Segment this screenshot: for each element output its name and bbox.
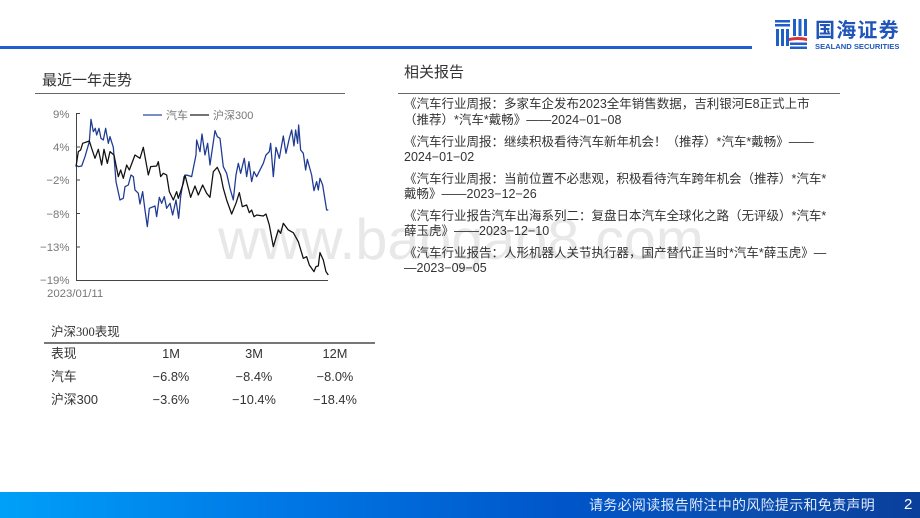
table header row: 12M [323, 346, 347, 361]
y axis labels: 9% [53, 109, 70, 121]
report 1: （推荐）*汽车*戴畅》——2024−01−08 [404, 112, 621, 126]
legend: 沪深300 [213, 108, 253, 122]
report 5: —2023−09−05 [404, 260, 487, 274]
table row: auto [51, 369, 353, 384]
disclaimer: 请务必阅读报告附注中的风险提示和免责声明 [589, 497, 875, 513]
x axis label: 2023/01/11 [47, 288, 103, 300]
table row: CSI 300: −10.4% [232, 392, 276, 407]
page number: 2 [904, 496, 912, 513]
y axis labels [40, 109, 70, 287]
logo [775, 19, 900, 51]
table header row: 表现 [51, 346, 77, 361]
heading: CSI 300 performance: 沪深300表现 [51, 325, 120, 339]
report 1: 《汽车行业周报：多家车企发布2023全年销售数据，吉利银河E8正式上市 [404, 97, 810, 111]
report 4: 《汽车行业报告汽车出海系列二：复盘日本汽车全球化之路（无评级）*汽车* [404, 209, 826, 223]
table row: CSI 300 [51, 392, 357, 407]
table row: auto: 汽车 [51, 369, 77, 384]
heading: recent one-year trend: 最近一年走势 [42, 72, 132, 89]
table row: CSI 300: 沪深300 [51, 392, 98, 407]
y axis labels: −2% [46, 175, 70, 187]
table header row: 3M [245, 346, 263, 361]
header rule [0, 46, 752, 49]
y axis labels: −19% [40, 275, 70, 287]
report 3: 戴畅》——2023−12−26 [404, 186, 537, 200]
heading: related reports: 相关报告 [404, 64, 464, 81]
table row: CSI 300: −18.4% [313, 392, 357, 407]
report 5 [404, 246, 826, 274]
series: auto [76, 119, 328, 227]
legend: 汽车 [166, 108, 188, 122]
report 2: 《汽车行业周报：继续积极看待汽车新年机会！（推荐）*汽车*戴畅》—— [404, 135, 814, 149]
report 4: 薛玉虎》——2023−12−10 [404, 224, 549, 238]
report 5: 《汽车行业报告：人形机器人关节执行器，国产替代正当时*汽车*薛玉虎》— [404, 246, 826, 260]
table header row: 1M [162, 346, 180, 361]
table: performance [51, 346, 357, 407]
report 4 [404, 209, 826, 238]
report 2: 2024−01−02 [404, 150, 474, 164]
table row: auto: −8.4% [236, 369, 272, 384]
table row: auto: −8.0% [317, 369, 353, 384]
report 1 [404, 97, 810, 126]
logo: 国海证券 [815, 20, 900, 42]
report 3 [404, 172, 826, 200]
axes [76, 114, 328, 280]
table row: auto: −6.8% [153, 369, 189, 384]
line chart: auto vs CSI 300 [40, 108, 329, 300]
table header row [51, 346, 347, 361]
report 2 [404, 135, 814, 164]
footer bar [0, 492, 920, 518]
report 3: 《汽车行业周报：当前位置不必悲观，积极看待汽车跨年机会（推荐）*汽车* [404, 172, 826, 186]
y axis labels: −8% [46, 209, 70, 221]
legend [143, 108, 253, 122]
y axis labels: −13% [40, 242, 70, 254]
series: CSI 300 [76, 141, 328, 275]
logo: SEALAND SECURITIES [815, 42, 899, 51]
table row: CSI 300: −3.6% [153, 392, 189, 407]
y axis labels: 4% [53, 142, 70, 154]
report list [404, 97, 826, 274]
watermark: www.baogao8.com [218, 208, 704, 272]
